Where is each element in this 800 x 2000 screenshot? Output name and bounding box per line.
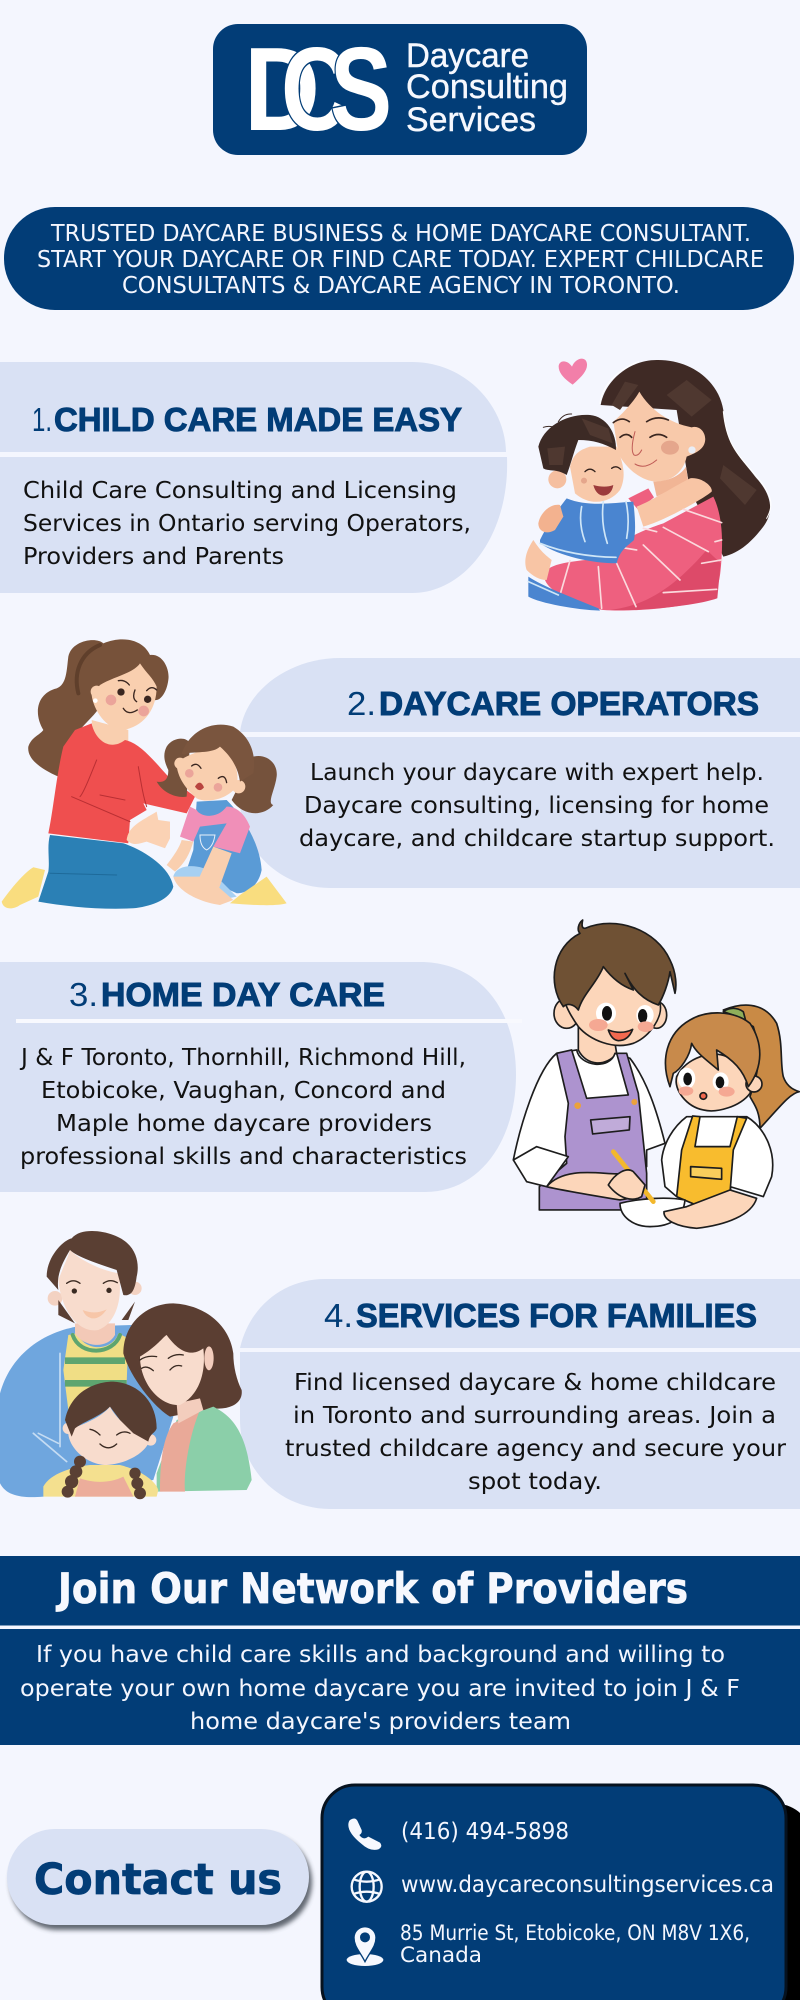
text 3: Etobicoke, Vaughan, Concord and	[41, 1078, 446, 1104]
illustration: mother comforting crying girl	[2, 639, 287, 909]
heading 2: DAYCARE OPERATORS	[379, 686, 759, 723]
text: join: operate your own home daycare you are invited to join J & F	[20, 1676, 740, 1702]
intro banner	[4, 207, 794, 310]
text: website: www.daycareconsultingservices.ca	[401, 1872, 774, 1898]
contact us pill: Contact us	[34, 1855, 282, 1905]
text: address: Canada	[400, 1943, 482, 1967]
text 2: daycare, and childcare startup support.	[299, 826, 775, 852]
intro banner: TRUSTED DAYCARE BUSINESS & HOME DAYCARE CONSULTANT.	[50, 221, 751, 247]
icon: phone	[348, 1818, 381, 1850]
heading 4: SERVICES FOR FAMILIES	[356, 1298, 757, 1335]
text: join: home daycare's providers team	[190, 1709, 571, 1735]
logo monogram DCS: D	[244, 23, 320, 156]
heading 3: 3.	[69, 977, 98, 1014]
panel: section 4 services for families	[240, 1279, 800, 1509]
text 1: Services in Ontario serving Operators,	[23, 511, 471, 537]
logo badge	[213, 23, 587, 156]
text 2: Daycare consulting, licensing for home	[304, 793, 769, 819]
text 1: Providers and Parents	[23, 544, 284, 570]
heading: join: Join Our Network of Providers	[55, 1564, 688, 1613]
heading 4: 4.	[324, 1298, 353, 1335]
heading 1: 1.	[32, 402, 52, 439]
panel: section 3 home day care	[0, 962, 522, 1192]
text 2: Launch your daycare with expert help.	[310, 760, 764, 786]
logo monogram DCS: C	[281, 23, 349, 156]
icon: location pin	[347, 1927, 383, 1966]
text 2	[299, 760, 775, 852]
illustration: mother hugging son	[525, 359, 771, 611]
text 4: trusted childcare agency and secure your	[285, 1436, 787, 1462]
heading 3: HOME DAY CARE	[101, 977, 385, 1014]
panel: section 2 daycare operators	[240, 658, 800, 888]
text: address: 85 Murrie St, Etobicoke, ON M8V 1X6,	[400, 1921, 750, 1945]
text 3: Maple home daycare providers	[56, 1111, 432, 1137]
text: phone: (416) 494-5898	[401, 1819, 569, 1845]
text 3	[19, 1045, 467, 1170]
intro banner: CONSULTANTS & DAYCARE AGENCY IN TORONTO.	[122, 273, 680, 299]
text 4: spot today.	[468, 1469, 602, 1495]
illustration: boy and girl cooking	[513, 920, 799, 1228]
heading 2: 2.	[347, 686, 376, 723]
text: address	[400, 1921, 750, 1967]
logo monogram DCS: S	[330, 23, 392, 156]
text 4: Find licensed daycare & home childcare	[294, 1370, 776, 1396]
text 3: professional skills and characteristics	[20, 1144, 467, 1170]
text: join	[20, 1642, 740, 1735]
text 3: J & F Toronto, Thornhill, Richmond Hill,	[19, 1045, 466, 1071]
text 1	[23, 478, 471, 570]
text 4: in Toronto and surrounding areas. Join a	[293, 1403, 776, 1429]
contact us pill	[7, 1829, 312, 1930]
heading 1: CHILD CARE MADE EASY	[54, 402, 462, 439]
panel: section 1 child care made easy	[0, 362, 507, 593]
logo monogram DCS	[244, 23, 392, 156]
intro banner: START YOUR DAYCARE OR FIND CARE TODAY. EXPERT CHILDCARE	[37, 247, 764, 273]
icon: globe	[352, 1872, 382, 1902]
logo wordmark: Services	[406, 101, 536, 139]
text 4	[285, 1370, 787, 1495]
icon: heart	[559, 359, 587, 385]
logo wordmark	[406, 37, 568, 139]
logo wordmark: Consulting	[406, 68, 568, 106]
panel: join our network	[0, 1556, 800, 1745]
text: join: If you have child care skills and background and willing to	[36, 1642, 725, 1668]
logo wordmark: Daycare	[406, 37, 529, 75]
contact panel	[322, 1785, 800, 2000]
illustration: family portrait	[0, 1231, 252, 1499]
text 1: Child Care Consulting and Licensing	[23, 478, 457, 504]
